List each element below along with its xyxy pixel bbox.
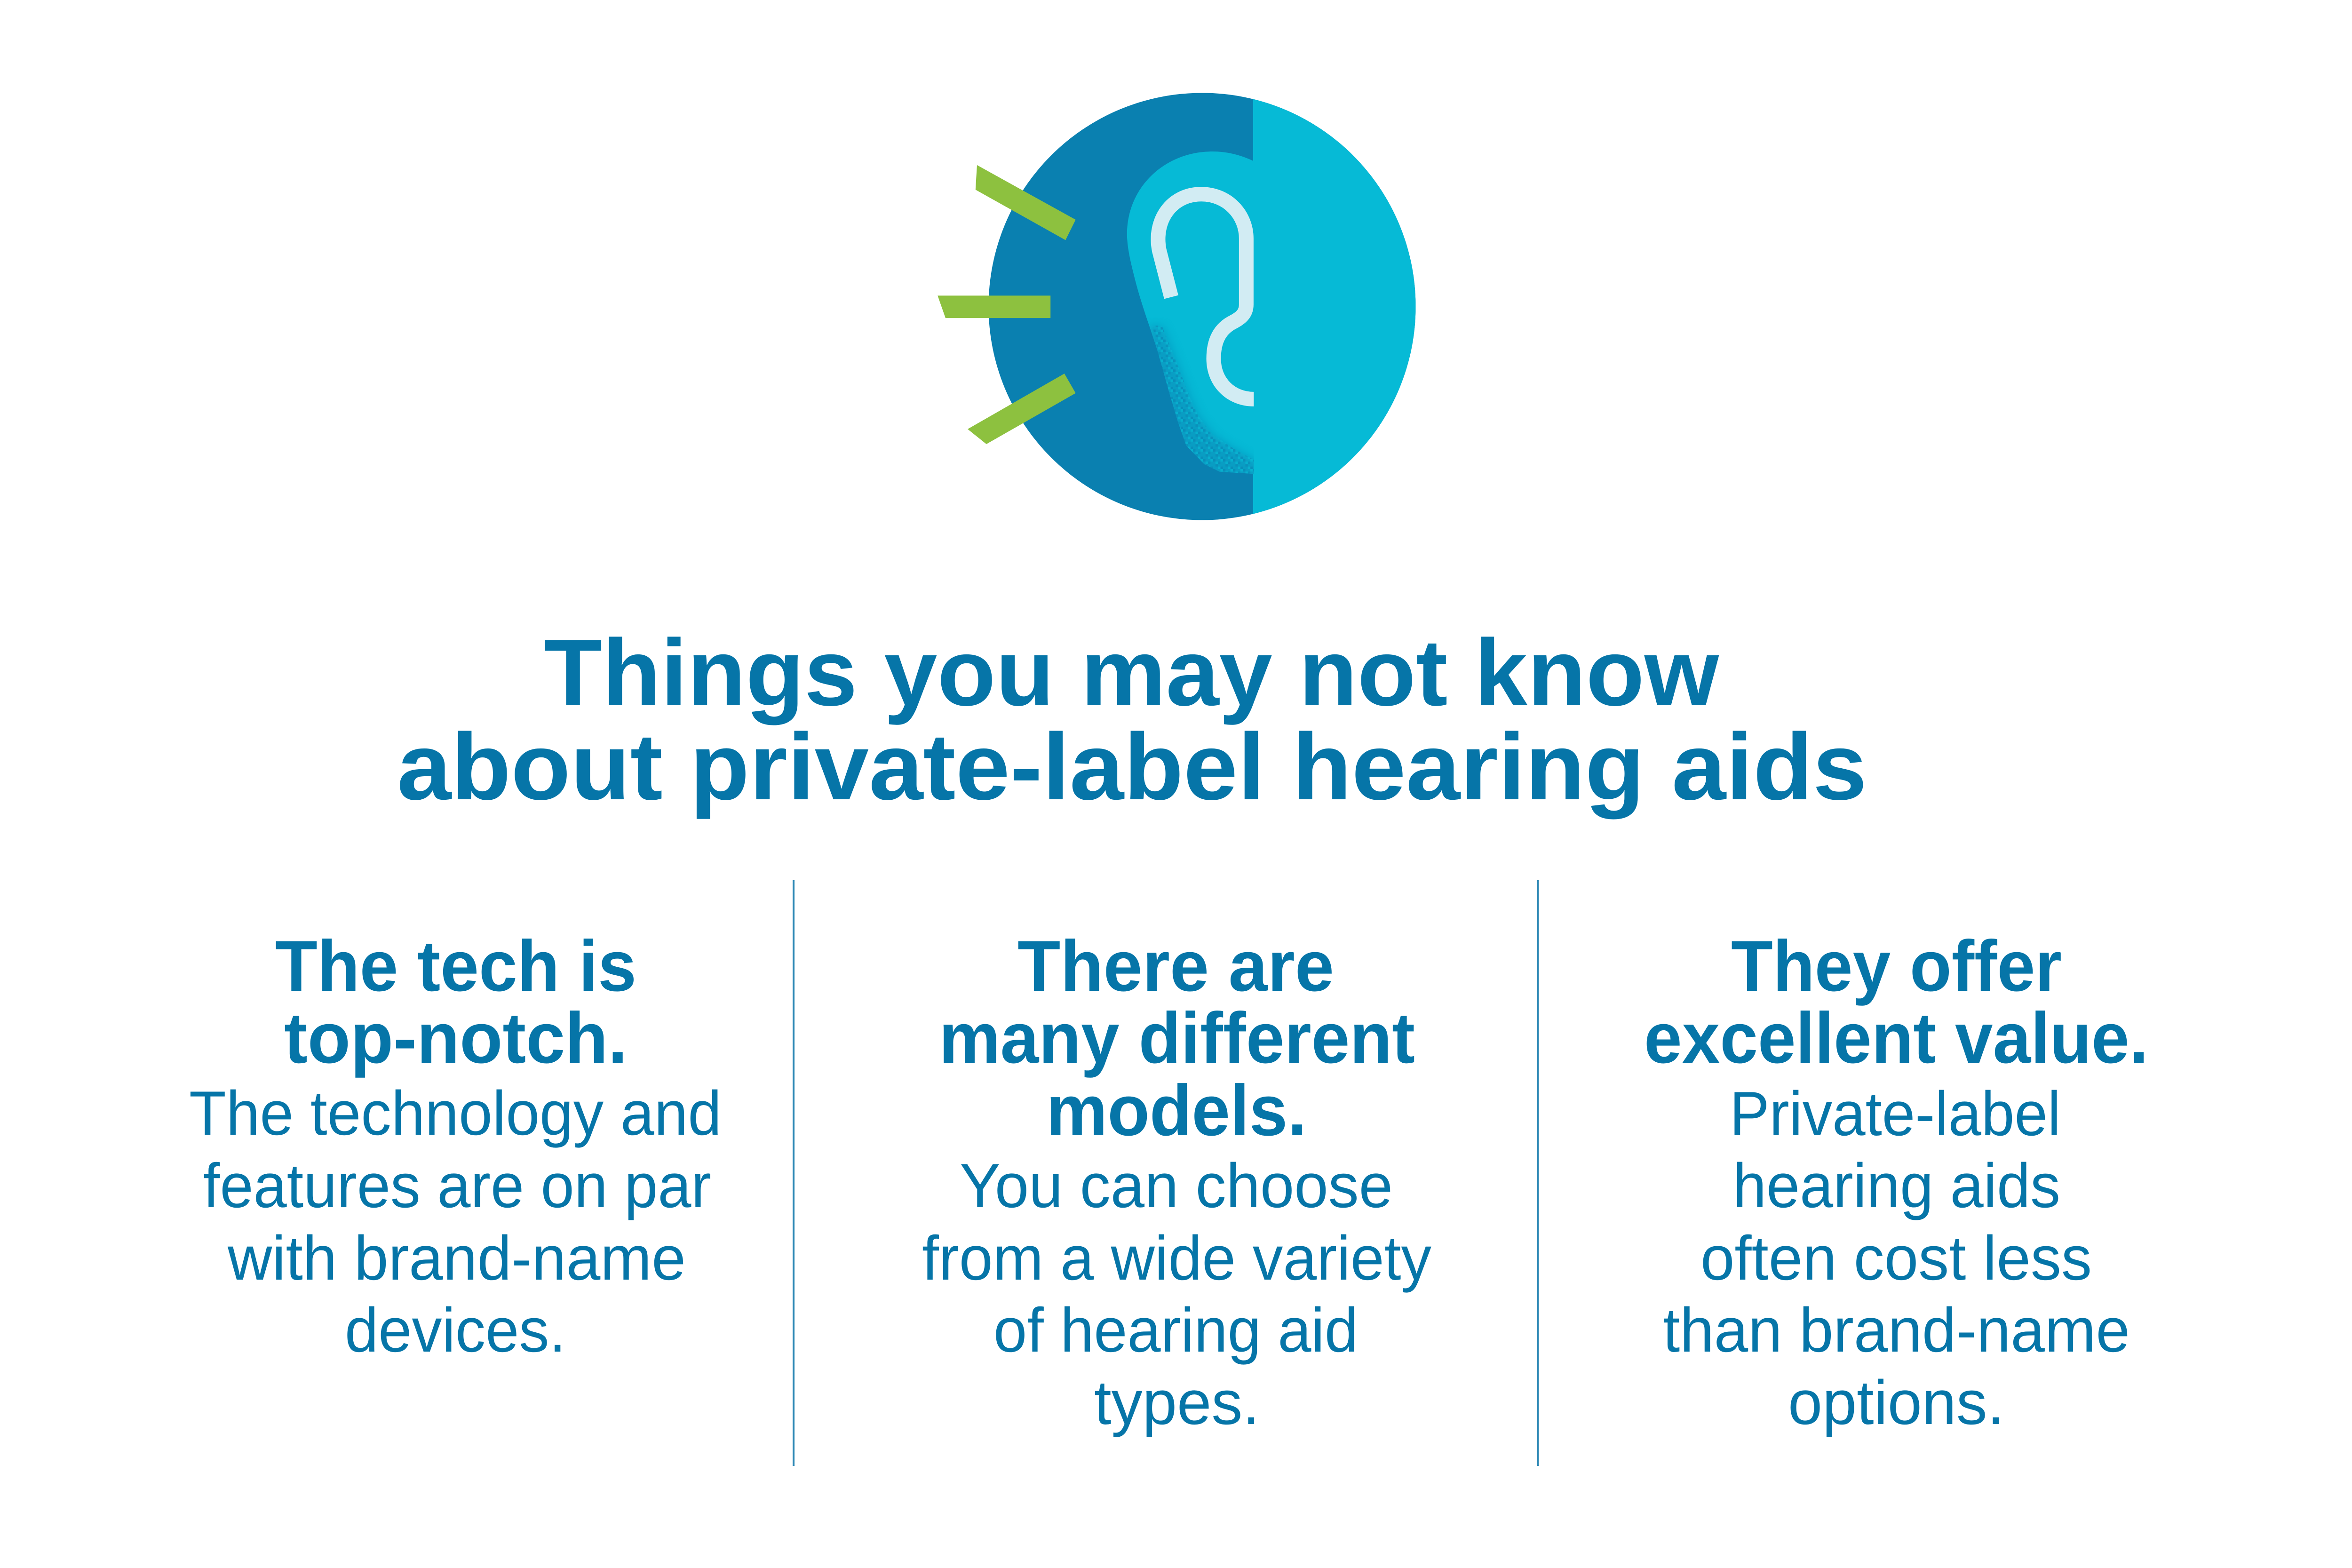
heading: models: models.: [1046, 1070, 1307, 1151]
text: value body: hearing aids: [1733, 1151, 2060, 1221]
icon: ear: [938, 151, 1259, 478]
text: the tech body: devices.: [345, 1296, 566, 1365]
title: [397, 620, 1867, 820]
icon: circle dark half: [989, 93, 1416, 520]
text: the tech body: features are on par: [203, 1151, 711, 1221]
text: models body: types.: [1094, 1368, 1260, 1438]
divider right: [1537, 880, 1539, 1466]
heading: value: They offer: [1731, 926, 2062, 1006]
sound line: middle: [938, 295, 1050, 318]
text: value body: [1663, 1079, 2130, 1438]
text: the tech body: The technology and: [189, 1079, 722, 1148]
text: value body: Private-label: [1730, 1079, 2061, 1149]
text: models body: [922, 1151, 1431, 1438]
ear inner line: [1158, 194, 1254, 399]
text: models body: from a wide variety: [922, 1224, 1431, 1293]
ear shape: [1127, 151, 1254, 474]
title: about private-label hearing aids: [397, 714, 1867, 820]
title: Things you may not know: [544, 620, 1719, 725]
heading: the tech: The tech is: [275, 926, 636, 1006]
panel: value: [1644, 926, 2148, 1438]
text: value body: options.: [1788, 1368, 2004, 1438]
icon: circle light half: [1253, 89, 1422, 525]
divider left: [793, 880, 795, 1466]
heading: value: excellent value.: [1644, 998, 2148, 1078]
heading: models: many different: [939, 998, 1415, 1078]
heading: models: There are: [1017, 926, 1334, 1006]
text: models body: You can choose: [960, 1151, 1393, 1221]
heading: models: [939, 926, 1415, 1151]
panel: the tech: [189, 926, 722, 1365]
text: value body: often cost less: [1700, 1224, 2092, 1293]
panel: models: [922, 926, 1431, 1438]
text: the tech body: with brand-name: [227, 1224, 686, 1293]
icon: ear with sound lines: [938, 89, 1422, 525]
heading: value: [1644, 926, 2148, 1078]
heading: the tech: top-notch.: [284, 998, 628, 1078]
ear lower edge shading: [1149, 326, 1259, 478]
text: models body: of hearing aid: [993, 1296, 1358, 1365]
sound line: top: [976, 165, 1076, 240]
text: the tech body: [189, 1079, 722, 1365]
heading: the tech: [275, 926, 636, 1078]
text: value body: than brand-name: [1663, 1296, 2130, 1365]
sound line: bottom: [968, 374, 1076, 444]
